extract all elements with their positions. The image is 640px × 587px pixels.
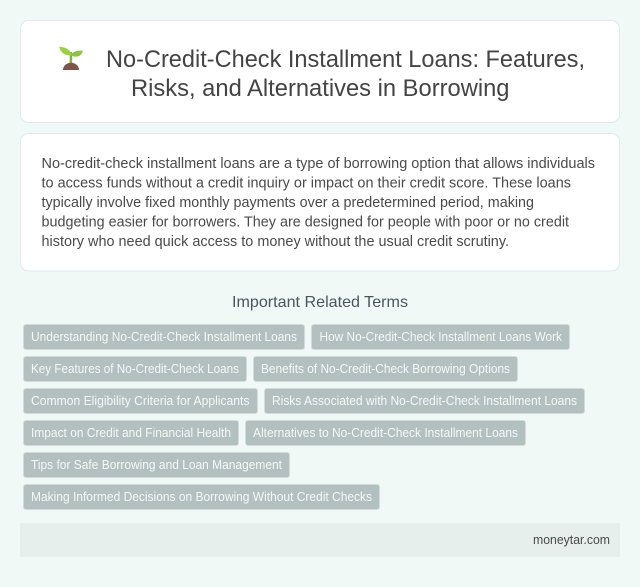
tag: alternatives: [246, 420, 526, 446]
footer source: moneytar.com: [533, 532, 610, 547]
tag: how it works: How No-Credit-Check Installment Loans Work: [320, 330, 563, 344]
tag: how it works: [312, 324, 570, 350]
text block: description: to access funds without a credit inquiry or impact on their credit score. These loans: [42, 176, 571, 192]
title: Risks, and Alternatives in Borrowing: [131, 75, 510, 102]
tag: understanding: [24, 324, 304, 350]
tag: eligibility: Common Eligibility Criteria for Applicants: [31, 394, 250, 408]
tag: impact: [24, 420, 238, 446]
text block: description: budgeting easier for borrowers. They are designed for people with poor or no credit: [42, 214, 569, 230]
tag: tips: [24, 452, 290, 478]
tag: eligibility: [24, 388, 258, 414]
text block: description: No-credit-check installment loans are a type of borrowing option that allows individuals: [42, 156, 595, 172]
tag: key features: Key Features of No-Credit-Check Loans: [31, 362, 239, 376]
tag: risks: [264, 388, 584, 414]
tag: informed decisions: [24, 484, 380, 510]
panel: description card: [20, 134, 620, 271]
text block: description: [42, 156, 595, 250]
tag: risks: Risks Associated with No-Credit-Check Installment Loans: [272, 394, 577, 408]
tag: alternatives: Alternatives to No-Credit-Check Installment Loans: [253, 426, 518, 440]
tag: key features: [24, 356, 246, 382]
text block: description: history who need quick access to money without the usual credit scrutiny.: [42, 234, 509, 250]
heading: important related terms: Important Related Terms: [232, 294, 408, 311]
tag: tips: Tips for Safe Borrowing and Loan Management: [31, 458, 282, 472]
tag: impact: Impact on Credit and Financial Health: [31, 426, 231, 440]
tag: benefits: Benefits of No-Credit-Check Borrowing Options: [261, 362, 510, 376]
tag list: [24, 324, 584, 510]
icon: seedling: [59, 47, 83, 70]
footer: [20, 523, 620, 557]
tag: informed decisions: Making Informed Decisions on Borrowing Without Credit Checks: [31, 490, 372, 504]
panel: title card: [20, 20, 620, 122]
tag: understanding: Understanding No-Credit-Check Installment Loans: [31, 330, 297, 344]
tag: benefits: [254, 356, 518, 382]
text block: description: typically involve fixed monthly payments over a predetermined period, making: [42, 195, 534, 211]
title: No-Credit-Check Installment Loans: Features,: [106, 46, 585, 73]
title: [106, 46, 585, 102]
